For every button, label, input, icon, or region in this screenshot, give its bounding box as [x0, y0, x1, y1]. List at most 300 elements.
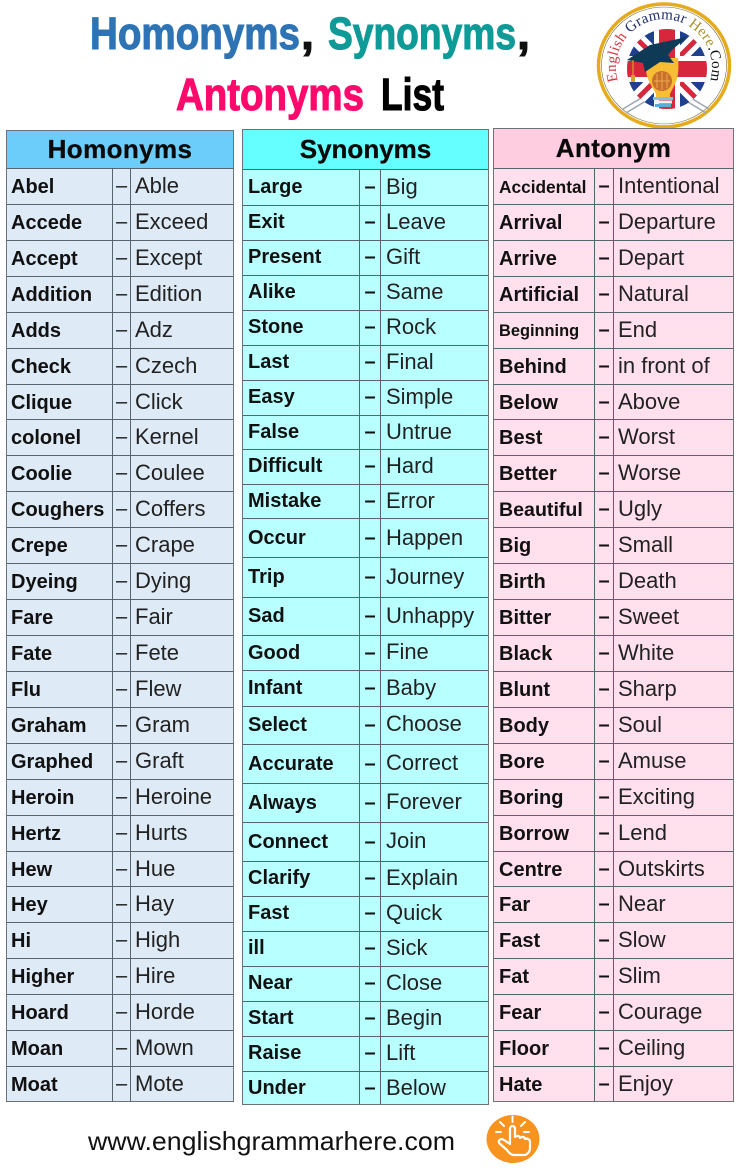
row: Select - Choose: Select: [248, 714, 307, 736]
row: Hoard - Horde: Horde: [135, 999, 195, 1024]
row: False - Untrue: False: [248, 421, 299, 443]
row: Far - Near: Far: [499, 894, 530, 916]
row: Accede - Exceed: –: [116, 211, 127, 233]
row: Coolie - Coulee: Coolie: [11, 463, 72, 485]
row: Blunt - Sharp: Blunt: [499, 679, 550, 701]
row: ill - Sick: –: [364, 937, 376, 959]
row: Moan - Mown: Mown: [135, 1035, 194, 1060]
row: Bitter - Sweet: –: [598, 606, 610, 628]
row: Accurate - Correct: Correct: [386, 750, 458, 775]
row: Last - Final: [243, 345, 488, 380]
row: Better - Worse: [494, 455, 733, 491]
row: Exit - Leave: –: [364, 211, 376, 233]
row: Flu - Flew: [7, 671, 233, 707]
row: Below - Above: –: [598, 391, 610, 413]
row: Boring - Exciting: –: [598, 786, 610, 808]
row: Borrow - Lend: Lend: [618, 820, 667, 845]
row: Birth - Death: Birth: [499, 571, 546, 593]
row: Large - Big: [243, 169, 488, 205]
row: Alike - Same: Alike: [248, 281, 296, 303]
row: Clique - Click: [7, 384, 233, 420]
row: Fate - Fete: Fete: [135, 640, 179, 665]
row: Accurate - Correct: [243, 744, 488, 783]
row: Artificial - Natural: [494, 276, 733, 312]
row: Infant - Baby: [243, 670, 488, 706]
row: Connect - Join: –: [364, 831, 376, 853]
row: Clique - Click: Click: [135, 389, 183, 414]
row: Large - Big: Big: [386, 174, 418, 199]
panel: antonyms: [493, 128, 734, 1102]
row: Good - Fine: Good: [248, 642, 300, 664]
row: Near - Close: [243, 966, 488, 1001]
row: Always - Forever: Forever: [386, 789, 462, 814]
row: Coughers - Coffers: –: [116, 498, 127, 520]
row: Accurate - Correct: –: [364, 753, 376, 775]
row: Always - Forever: [243, 783, 488, 822]
row: Start - Begin: –: [364, 1007, 376, 1029]
row: Moat - Mote: Moat: [11, 1074, 58, 1096]
row: Easy - Simple: –: [364, 386, 376, 408]
row: Bore - Amuse: [494, 743, 733, 779]
row: Exit - Leave: Exit: [248, 211, 285, 233]
row: Moat - Mote: –: [116, 1073, 127, 1095]
row: Under - Below: –: [364, 1077, 376, 1099]
row: Arrival - Departure: Departure: [618, 209, 716, 234]
row: Hate - Enjoy: –: [598, 1073, 610, 1095]
row: Addition - Edition: [7, 276, 233, 312]
row: Hew - Hue: –: [116, 858, 127, 880]
row: Big - Small: Big: [499, 535, 531, 557]
row: Moan - Mown: –: [116, 1037, 127, 1059]
row: Fast - Quick: Fast: [248, 902, 289, 924]
icon: English Grammar Here logo badge: [596, 2, 732, 128]
row: Accede - Exceed: [7, 204, 233, 240]
row: Crepe - Crape: Crape: [135, 532, 195, 557]
row: Hey - Hay: –: [116, 893, 127, 915]
row: Bitter - Sweet: Sweet: [618, 604, 679, 629]
row: Coughers - Coffers: Coffers: [135, 496, 206, 521]
row: Trip - Journey: Journey: [386, 564, 464, 589]
row: ill - Sick: ill: [248, 937, 265, 959]
row: Accidental - Intentional: Intentional: [618, 173, 720, 198]
row: Last - Final: –: [364, 351, 376, 373]
row: Artificial - Natural: Artificial: [499, 284, 579, 306]
row: Easy - Simple: [243, 380, 488, 415]
row: False - Untrue: Untrue: [386, 419, 452, 444]
row: Big - Small: –: [598, 534, 610, 556]
row: Far - Near: Near: [618, 891, 666, 916]
row: Floor - Ceiling: Ceiling: [618, 1035, 685, 1060]
row: Arrive - Depart: Depart: [618, 245, 684, 270]
row: Fare - Fair: Fare: [11, 607, 53, 629]
row: Moan - Mown: Moan: [11, 1038, 63, 1060]
heading: Synonyms: [243, 130, 488, 169]
row: Best - Worst: Best: [499, 427, 542, 449]
row: Clarify - Explain: –: [364, 867, 376, 889]
row: Abel - Able: –: [116, 175, 127, 197]
row: Hew - Hue: Hue: [135, 856, 175, 881]
row: Abel - Able: [7, 168, 233, 204]
row: Artificial - Natural: –: [598, 283, 610, 305]
row: Under - Below: [243, 1071, 488, 1104]
row: Beginning - End: –: [598, 319, 610, 341]
row: Select - Choose: –: [364, 714, 376, 736]
row: Crepe - Crape: Crepe: [11, 535, 68, 557]
row: Heroin - Heroine: [7, 779, 233, 815]
row: Alike - Same: Same: [386, 279, 443, 304]
heading: Antonym: [494, 129, 733, 168]
row: Connect - Join: [243, 822, 488, 861]
row: Best - Worst: Worst: [618, 424, 675, 449]
row: Black - White: Black: [499, 643, 552, 665]
row: colonel - Kernel: colonel: [11, 427, 81, 449]
row: Abel - Able: Abel: [11, 176, 54, 198]
row: Higher - Hire: Hire: [135, 963, 175, 988]
row: Good - Fine: –: [364, 642, 376, 664]
title: Synonyms: [328, 8, 516, 59]
row: Addition - Edition: Edition: [135, 281, 202, 306]
row: Fast - Quick: Quick: [386, 900, 442, 925]
row: Body - Soul: Body: [499, 715, 549, 737]
row: Hoard - Horde: –: [116, 1001, 127, 1023]
row: Accept - Except: Except: [135, 245, 202, 270]
row: Coughers - Coffers: Coughers: [11, 499, 104, 521]
row: Near - Close: Near: [248, 972, 292, 994]
row: Accept - Except: Accept: [11, 248, 78, 270]
row: Connect - Join: Join: [386, 828, 426, 853]
row: Bitter - Sweet: [494, 599, 733, 635]
row: Dyeing - Dying: Dying: [135, 568, 191, 593]
row: Arrive - Depart: Arrive: [499, 248, 557, 270]
row: Check - Czech: –: [116, 355, 127, 377]
row: colonel - Kernel: –: [116, 426, 127, 448]
row: Mistake - Error: –: [364, 490, 376, 512]
row: False - Untrue: [243, 415, 488, 449]
row: Beginning - End: Beginning: [499, 322, 579, 340]
row: Hi - High: –: [116, 929, 127, 951]
row: Fast - Slow: –: [598, 929, 610, 951]
row: colonel - Kernel: [7, 419, 233, 455]
row: Floor - Ceiling: –: [598, 1037, 610, 1059]
row: Fast - Quick: –: [364, 902, 376, 924]
row: Stone - Rock: [243, 310, 488, 345]
row: Centre - Outskirts: Outskirts: [618, 856, 705, 881]
row: Big - Small: Small: [618, 532, 673, 557]
row: Beautiful - Ugly: Beautiful: [499, 499, 583, 521]
row: Boring - Exciting: Exciting: [618, 784, 695, 809]
row: Black - White: [494, 635, 733, 671]
title: Antonyms: [176, 69, 364, 120]
row: Alike - Same: –: [364, 281, 376, 303]
row: Floor - Ceiling: [494, 1030, 733, 1066]
row: Arrival - Departure: Arrival: [499, 212, 562, 234]
row: Always - Forever: –: [364, 792, 376, 814]
row: Graham - Gram: Graham: [11, 715, 87, 737]
row: Clique - Click: Clique: [11, 392, 72, 414]
row: Coolie - Coulee: –: [116, 462, 127, 484]
row: Hate - Enjoy: Hate: [499, 1074, 542, 1096]
row: Beginning - End: [494, 312, 733, 348]
row: Difficult - Hard: [243, 449, 488, 484]
row: Dyeing - Dying: Dyeing: [11, 571, 78, 593]
row: Arrival - Departure: [494, 204, 733, 240]
row: Crepe - Crape: [7, 527, 233, 563]
row: Borrow - Lend: Borrow: [499, 823, 569, 845]
row: Trip - Journey: –: [364, 566, 376, 588]
heading: Homonyms: [7, 131, 233, 168]
row: Near - Close: –: [364, 972, 376, 994]
row: Graphed - Graft: Graft: [135, 748, 184, 773]
row: Boring - Exciting: Boring: [499, 787, 563, 809]
row: Fare - Fair: –: [116, 606, 127, 628]
row: Hertz - Hurts: Hertz: [11, 823, 61, 845]
row: Far - Near: –: [598, 893, 610, 915]
row: Accept - Except: –: [116, 247, 127, 269]
row: Easy - Simple: Simple: [386, 384, 453, 409]
row: Behind - in front of: [494, 348, 733, 384]
row: Bore - Amuse: –: [598, 750, 610, 772]
row: Raise - Lift: Lift: [386, 1040, 415, 1065]
row: Fast - Slow: Slow: [618, 927, 666, 952]
row: Stone - Rock: Stone: [248, 316, 304, 338]
row: Coolie - Coulee: [7, 455, 233, 491]
row: Start - Begin: Start: [248, 1007, 294, 1029]
row: Near - Close: Close: [386, 970, 442, 995]
row: Fast - Slow: [494, 922, 733, 958]
row: Fare - Fair: Fair: [135, 604, 173, 629]
title: ,: [517, 8, 530, 59]
row: Crepe - Crape: –: [116, 534, 127, 556]
row: Hi - High: [7, 922, 233, 958]
row: Centre - Outskirts: Centre: [499, 859, 562, 881]
row: Bitter - Sweet: Bitter: [499, 607, 551, 629]
row: Body - Soul: Soul: [618, 712, 662, 737]
row: Mistake - Error: Error: [386, 488, 435, 513]
row: Birth - Death: –: [598, 570, 610, 592]
row: Flu - Flew: –: [116, 678, 127, 700]
row: Blunt - Sharp: Sharp: [618, 676, 677, 701]
row: Hoard - Horde: [7, 994, 233, 1030]
row: Trip - Journey: Trip: [248, 566, 285, 588]
row: Stone - Rock: –: [364, 316, 376, 338]
row: colonel - Kernel: Kernel: [135, 424, 199, 449]
row: Moat - Mote: Mote: [135, 1071, 184, 1096]
row: Hate - Enjoy: [494, 1066, 733, 1102]
row: Addition - Edition: Addition: [11, 284, 92, 306]
row: Difficult - Hard: Difficult: [248, 455, 322, 477]
row: Fat - Slim: [494, 958, 733, 994]
row: Blunt - Sharp: –: [598, 678, 610, 700]
row: Easy - Simple: Easy: [248, 386, 295, 408]
row: Big - Small: [494, 527, 733, 563]
row: Dyeing - Dying: [7, 563, 233, 599]
heading: Synonyms: Synonyms: [300, 134, 431, 164]
row: Last - Final: Final: [386, 349, 434, 374]
row: Connect - Join: Connect: [248, 831, 328, 853]
icon: light bulb with brain: [646, 58, 678, 107]
row: Fear - Courage: [494, 994, 733, 1030]
row: Hey - Hay: [7, 886, 233, 922]
row: Present - Gift: Gift: [386, 244, 420, 269]
row: Hi - High: Hi: [11, 930, 31, 952]
row: Arrival - Departure: –: [598, 211, 610, 233]
row: Raise - Lift: [243, 1036, 488, 1071]
row: Start - Begin: [243, 1001, 488, 1036]
row: Large - Big: Large: [248, 176, 302, 198]
row: Good - Fine: [243, 635, 488, 670]
row: Clique - Click: –: [116, 391, 127, 413]
row: Below - Above: Below: [499, 392, 558, 414]
row: Always - Forever: Always: [248, 792, 317, 814]
row: Flu - Flew: Flew: [135, 676, 181, 701]
row: Fat - Slim: Slim: [618, 963, 661, 988]
row: Clarify - Explain: Explain: [386, 865, 458, 890]
row: Stone - Rock: Rock: [386, 314, 436, 339]
row: Dyeing - Dying: –: [116, 570, 127, 592]
title: List: [381, 69, 444, 120]
row: Graham - Gram: [7, 707, 233, 743]
row: Check - Czech: Czech: [135, 353, 197, 378]
row: Good - Fine: Fine: [386, 639, 429, 664]
row: Beautiful - Ugly: –: [598, 498, 610, 520]
row: Hey - Hay: Hay: [135, 891, 174, 916]
row: Far - Near: [494, 886, 733, 922]
row: Beautiful - Ugly: Ugly: [618, 496, 662, 521]
row: Select - Choose: Choose: [386, 711, 462, 736]
row: Select - Choose: [243, 706, 488, 744]
row: ill - Sick: Sick: [386, 935, 428, 960]
row: Sad - Unhappy: [243, 597, 488, 635]
row: Heroin - Heroine: Heroin: [11, 787, 74, 809]
row: Blunt - Sharp: [494, 671, 733, 707]
row: Beginning - End: End: [618, 317, 657, 342]
row: Abel - Able: Able: [135, 173, 179, 198]
row: Behind - in front of: Behind: [499, 356, 567, 378]
row: Alike - Same: [243, 275, 488, 310]
row: Sad - Unhappy: Unhappy: [386, 603, 474, 628]
row: Flu - Flew: Flu: [11, 679, 41, 701]
row: Below - Above: Above: [618, 389, 680, 414]
row: Sad - Unhappy: –: [364, 605, 376, 627]
row: Hi - High: High: [135, 927, 180, 952]
row: Higher - Hire: –: [116, 965, 127, 987]
row: Under - Below: Below: [386, 1075, 446, 1100]
row: Hate - Enjoy: Enjoy: [618, 1071, 673, 1096]
row: Centre - Outskirts: –: [598, 858, 610, 880]
row: Floor - Ceiling: Floor: [499, 1038, 549, 1060]
row: Adds - Adz: Adds: [11, 320, 61, 342]
row: Clarify - Explain: Clarify: [248, 867, 310, 889]
row: Occur - Happen: Occur: [248, 527, 306, 549]
row: Difficult - Hard: Hard: [386, 453, 434, 478]
row: ill - Sick: [243, 931, 488, 966]
row: Trip - Journey: [243, 557, 488, 597]
row: Accept - Except: [7, 240, 233, 276]
row: Infant - Baby: –: [364, 677, 376, 699]
row: Black - White: –: [598, 642, 610, 664]
row: Heroin - Heroine: –: [116, 786, 127, 808]
row: Centre - Outskirts: [494, 851, 733, 887]
row: Occur - Happen: –: [364, 527, 376, 549]
row: Accurate - Correct: Accurate: [248, 753, 334, 775]
row: Difficult - Hard: –: [364, 455, 376, 477]
row: Accede - Exceed: Accede: [11, 212, 82, 234]
row: Below - Above: [494, 384, 733, 420]
row: Hertz - Hurts: [7, 815, 233, 851]
row: Exit - Leave: [243, 205, 488, 240]
title: [90, 8, 530, 120]
row: Coughers - Coffers: [7, 491, 233, 527]
row: Moat - Mote: [7, 1066, 233, 1102]
row: Moan - Mown: [7, 1030, 233, 1066]
row: Infant - Baby: Baby: [386, 675, 436, 700]
row: Fat - Slim: Fat: [499, 966, 529, 988]
row: Fate - Fete: –: [116, 642, 127, 664]
row: Exit - Leave: Leave: [386, 209, 446, 234]
row: Beautiful - Ugly: [494, 491, 733, 527]
row: Fat - Slim: –: [598, 965, 610, 987]
row: Fate - Fete: Fate: [11, 643, 52, 665]
row: Best - Worst: [494, 419, 733, 455]
row: Birth - Death: Death: [618, 568, 677, 593]
row: Borrow - Lend: –: [598, 822, 610, 844]
row: Graphed - Graft: –: [116, 750, 127, 772]
row: Artificial - Natural: Natural: [618, 281, 689, 306]
row: Graham - Gram: –: [116, 714, 127, 736]
row: Better - Worse: Better: [499, 463, 557, 485]
row: Hertz - Hurts: Hurts: [135, 820, 188, 845]
row: Start - Begin: Begin: [386, 1005, 442, 1030]
title: Homonyms: [90, 8, 300, 59]
row: Infant - Baby: Infant: [248, 677, 302, 699]
icon: graduation cap: [627, 37, 687, 82]
panel: synonyms: [242, 129, 489, 1105]
row: Mistake - Error: Mistake: [248, 490, 321, 512]
row: Large - Big: –: [364, 176, 376, 198]
row: Body - Soul: [494, 707, 733, 743]
row: Fare - Fair: [7, 599, 233, 635]
row: Check - Czech: [7, 348, 233, 384]
row: Graphed - Graft: [7, 743, 233, 779]
row: Higher - Hire: Higher: [11, 966, 74, 988]
row: Clarify - Explain: [243, 861, 488, 896]
row: Arrive - Depart: –: [598, 247, 610, 269]
row: False - Untrue: –: [364, 421, 376, 443]
title: ,: [301, 8, 314, 59]
row: Better - Worse: Worse: [618, 460, 681, 485]
row: Body - Soul: –: [598, 714, 610, 736]
row: Fear - Courage: Courage: [618, 999, 702, 1024]
row: Hoard - Horde: Hoard: [11, 1002, 69, 1024]
icon: orange pointing hand: [486, 1115, 540, 1163]
row: Graphed - Graft: Graphed: [11, 751, 93, 773]
heading: Antonym: Antonym: [556, 133, 671, 163]
footer website url: www.englishgrammarhere.com: [87, 1126, 455, 1156]
row: Best - Worst: –: [598, 426, 610, 448]
row: Coolie - Coulee: Coulee: [135, 460, 205, 485]
row: Fate - Fete: [7, 635, 233, 671]
row: Boring - Exciting: [494, 779, 733, 815]
row: Arrive - Depart: [494, 240, 733, 276]
row: Accidental - Intentional: Accidental: [499, 177, 586, 197]
row: Fear - Courage: Fear: [499, 1002, 541, 1024]
row: Raise - Lift: –: [364, 1042, 376, 1064]
row: Hew - Hue: Hew: [11, 859, 52, 881]
row: Accidental - Intentional: [494, 168, 733, 204]
row: Mistake - Error: [243, 484, 488, 518]
row: Under - Below: Under: [248, 1077, 306, 1099]
row: Fear - Courage: –: [598, 1001, 610, 1023]
